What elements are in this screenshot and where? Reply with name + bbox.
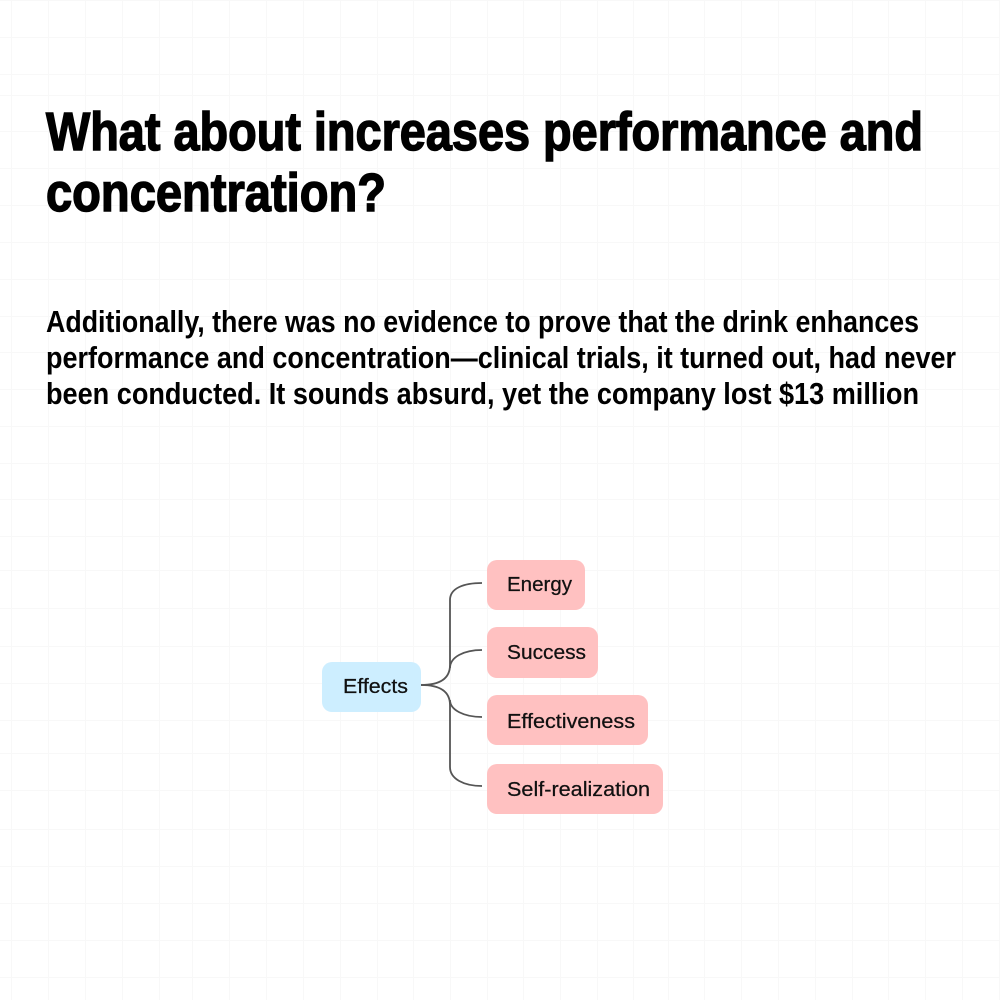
connector lines <box>421 583 482 786</box>
node: Self-realization: Self-realization <box>507 779 650 801</box>
diagram: effects mind map <box>322 560 663 814</box>
body text <box>46 304 956 411</box>
node: Effectiveness <box>487 695 648 745</box>
root node: Effects: Effects <box>343 676 408 698</box>
node: Success <box>487 627 598 678</box>
root node: Effects <box>322 662 421 712</box>
node: Effectiveness: Effectiveness <box>507 711 635 733</box>
node: Success: Success <box>507 642 586 664</box>
node: Self-realization <box>487 764 663 814</box>
node: Energy <box>487 560 585 610</box>
title: concentration? <box>46 163 386 223</box>
node: Energy: Energy <box>507 574 572 596</box>
title <box>46 102 923 223</box>
